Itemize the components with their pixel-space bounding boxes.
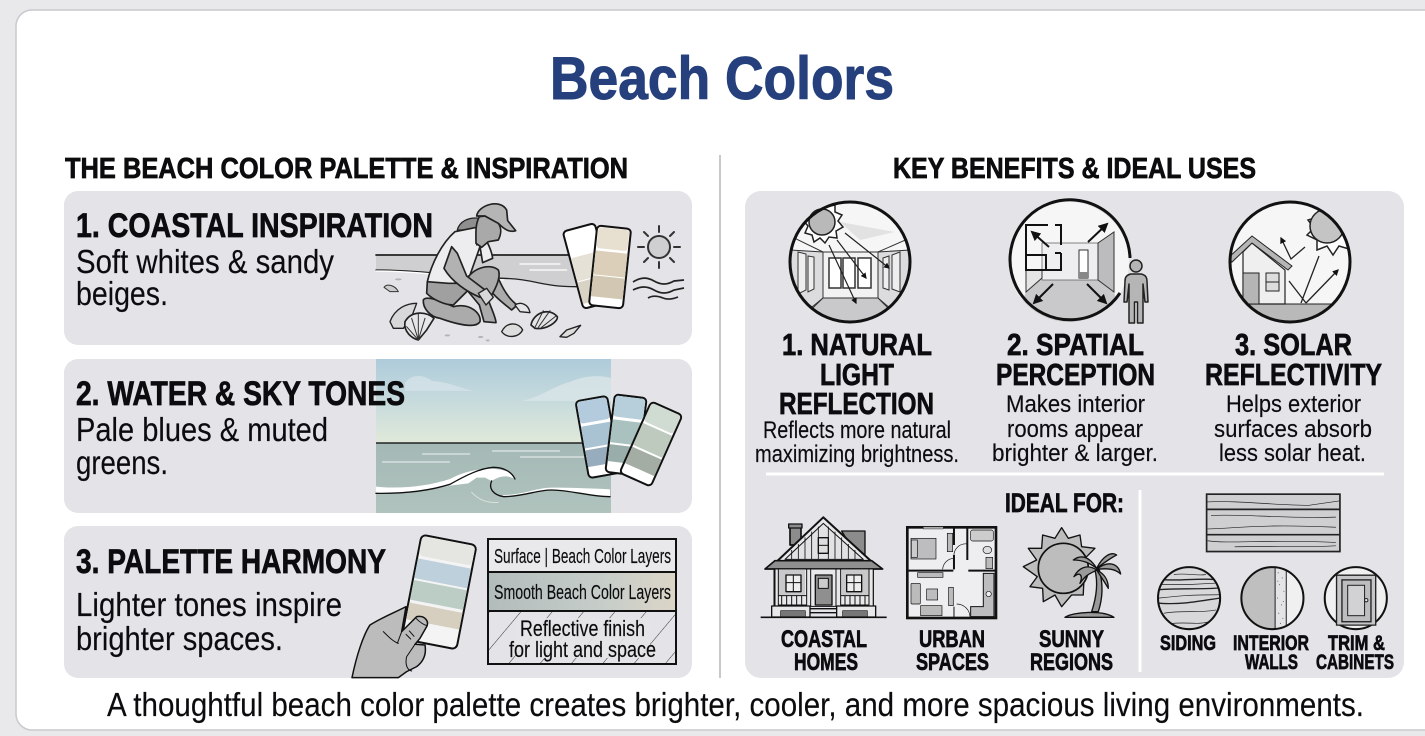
benefit 1 text (755, 417, 959, 468)
label: trim and cabinets (1316, 632, 1394, 674)
panel: benefits and uses (745, 191, 1404, 678)
benefit 1 heading: 1. NATURAL (782, 327, 932, 362)
panel 1 text: beiges. (76, 275, 168, 312)
label: interior walls: WALLS (1245, 651, 1298, 674)
icon: wood plank sample (1207, 494, 1340, 552)
icon: interior wall circle (1241, 566, 1303, 630)
panel 2 text: greens. (76, 444, 168, 481)
benefit 2 heading (996, 327, 1155, 392)
benefit 3 heading: REFLECTIVITY (1205, 357, 1382, 392)
panel: coastal inspiration (64, 191, 692, 345)
icon: siding circle (1158, 567, 1220, 629)
table row text: Smooth Beach Color Layers (494, 582, 671, 604)
icon: natural light room (790, 202, 910, 330)
panel 3 text: brighter spaces. (76, 620, 283, 657)
label: urban spaces (916, 626, 989, 676)
benefit 3 text: Helps exterior (1226, 391, 1361, 418)
benefit 3 heading: 3. SOLAR (1235, 327, 1352, 362)
panel 2 text: Pale blues & muted (76, 411, 328, 448)
benefit 2 heading: PERCEPTION (996, 357, 1155, 392)
table row text: Reflective finish (520, 616, 645, 641)
panel: palette harmony (64, 526, 692, 678)
benefit 1 text: Reflects more natural (763, 417, 951, 444)
benefit 1 heading: REFLECTION (779, 386, 934, 421)
swatch: blue-green card (605, 394, 647, 476)
benefit 3 text: surfaces absorb (1214, 416, 1372, 443)
icon: hand holding card (352, 607, 427, 678)
benefit 2 text: brighter & larger. (992, 440, 1158, 467)
label: sunny regions: REGIONS (1030, 649, 1113, 676)
label: interior walls: INTERIOR (1233, 632, 1309, 655)
swatch: sandy beige card (589, 225, 631, 309)
panel 1 text: Soft whites & sandy (76, 243, 334, 280)
label: urban spaces: URBAN (919, 626, 985, 653)
benefit 2 text (992, 391, 1158, 467)
table row text (494, 546, 671, 662)
panel 3 heading: 3. PALETTE HARMONY (76, 543, 386, 581)
heading: benefits and uses: KEY BENEFITS & IDEAL USES (893, 153, 1256, 185)
icon: sun and palm tree (1023, 528, 1121, 617)
label: trim and cabinets: CABINETS (1316, 651, 1394, 674)
column divider (719, 155, 721, 678)
benefit 3 text: less solar heat. (1219, 440, 1366, 467)
panel 2 text (76, 411, 328, 481)
table row text: for light and space (509, 637, 656, 662)
label: coastal homes: COASTAL (781, 626, 867, 653)
ideal for heading: IDEAL FOR: (1005, 488, 1124, 518)
benefit 1 heading (779, 327, 934, 421)
table: surface layers (488, 539, 676, 664)
icon: trim and cabinet circle (1325, 567, 1387, 629)
icon: sun (638, 226, 680, 268)
illustration: woman collecting shells on beach (376, 204, 581, 341)
swatch: white to beige card (563, 223, 615, 309)
panel 3 text: Lighter tones inspire (76, 586, 342, 623)
panel: water and sky tones (64, 359, 692, 513)
swatch: pale blue card (575, 396, 621, 478)
swatch: gradient palette card (401, 535, 477, 649)
label: sunny regions (1030, 626, 1113, 676)
label: coastal homes (781, 626, 867, 676)
icon: coastal home (761, 517, 887, 617)
panel 3 text (76, 586, 342, 657)
table row text: Surface | Beach Color Layers (494, 546, 671, 568)
benefit 2 text: Makes interior (1006, 391, 1145, 418)
swatch: muted green card (620, 401, 682, 487)
label: siding: SIDING (1160, 632, 1216, 655)
label: trim and cabinets: TRIM & (1328, 632, 1385, 655)
title: Beach Colors (550, 45, 894, 112)
label: urban spaces: SPACES (916, 649, 989, 676)
benefit 3 heading (1205, 327, 1382, 392)
benefit 3 text (1214, 391, 1372, 467)
heading: palette and inspiration: THE BEACH COLOR PALETTE & INSPIRATION (65, 153, 628, 185)
panel 1 text (76, 243, 334, 312)
label: interior walls (1233, 632, 1309, 674)
benefit 2 heading: 2. SPATIAL (1007, 327, 1144, 362)
icon: urban floor plan (907, 527, 996, 618)
panel 2 heading: 2. WATER & SKY TONES (76, 375, 405, 413)
benefit 1 text: maximizing brightness. (755, 441, 959, 468)
label: coastal homes: HOMES (794, 649, 858, 676)
icon: standing person (1124, 260, 1148, 323)
icon: solar reflectivity (1228, 200, 1352, 324)
icon: spatial perception (1009, 200, 1148, 330)
photo: sea and sky scene (376, 359, 611, 513)
benefit 2 text: rooms appear (1007, 416, 1143, 443)
panel 1 heading: 1. COASTAL INSPIRATION (76, 207, 433, 245)
benefit 1 heading: LIGHT (820, 357, 894, 392)
icon: waves (633, 278, 684, 299)
label: sunny regions: SUNNY (1039, 626, 1104, 653)
